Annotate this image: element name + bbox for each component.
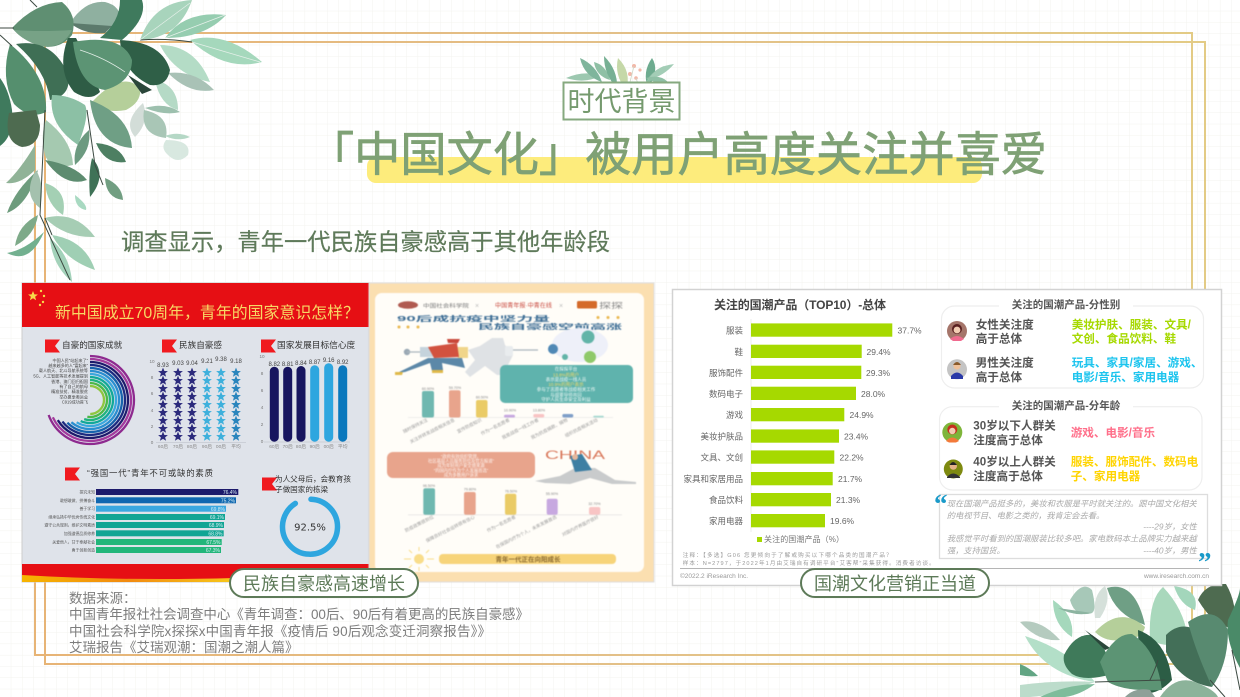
star pictogram chart	[149, 339, 246, 450]
confidence bar chart: 2	[261, 422, 264, 427]
consumer quotes: 我感觉平时看到的国潮服装比较多吧。家电数码本土品牌实力越来越	[947, 534, 1198, 544]
teal callout: 与叔辈导师共同	[550, 392, 582, 398]
data sources: 中国社会科学院x探探x中国青年报《疫情后 90后观念变迁洞察报告》》	[69, 623, 491, 639]
qualities horizontal bar chart: 68.8%	[208, 532, 223, 538]
top 10 bar chart: 家用电器	[709, 516, 743, 526]
qualities horizontal bar chart: 加强道德品质修养	[64, 531, 95, 536]
radial achievements chart: 载人航天、北斗导航系统等	[39, 367, 88, 373]
small bar chart 2: 作为一名志愿者	[486, 513, 517, 534]
donut: 92.5%: 92.5%	[294, 522, 326, 534]
top 10 bar chart: 28.0%	[861, 389, 886, 399]
teal callout: 在探探平台	[555, 366, 578, 372]
top 10 bar chart: 美妆护肤品	[700, 432, 743, 442]
top 10 bar chart	[683, 297, 922, 544]
salmon callout	[387, 452, 535, 478]
star pictogram chart: 8.93	[157, 363, 169, 369]
top 10 bar chart: 22.2%	[840, 452, 864, 462]
footer rule and credits: www.iresearch.com.cn	[1143, 573, 1209, 580]
confidence bar chart: 8	[261, 371, 264, 376]
consumer quotes: ”	[1198, 547, 1212, 577]
star pictogram chart: 4	[151, 408, 154, 413]
confidence bar chart: 60后	[269, 443, 280, 450]
icon: woman avatar	[947, 321, 967, 341]
qualities horizontal bar chart: 67.3%	[206, 548, 221, 554]
age box: 游戏、电影/音乐	[1071, 426, 1155, 440]
top 10 bar chart: 关注的国潮产品（%）	[764, 534, 844, 544]
donut: 92.5%	[262, 474, 351, 555]
salmon callout: “政府有效组织管理、	[441, 453, 481, 460]
qualities horizontal bar chart: 75.2%	[221, 498, 236, 504]
foliage: top-left corner	[0, 0, 262, 282]
top 10 bar chart: 21.3%	[836, 495, 861, 505]
small bar chart 2: 79.80%	[464, 488, 477, 492]
age box: 30岁以下人群关	[973, 418, 1056, 432]
salmon callout: “的国内疗作为个人发展首选”	[434, 467, 489, 474]
star pictogram chart: 70后	[173, 443, 183, 450]
top 10 bar chart: 食品饮料	[709, 495, 743, 505]
small bar chart 1: 13.80%	[533, 408, 546, 412]
top 10 bar chart: 19.6%	[830, 516, 855, 526]
small bar chart 2: 55.90%	[546, 492, 559, 496]
gender box: 男性关注度	[976, 356, 1034, 370]
star pictogram chart: 60后	[158, 443, 168, 450]
chart notes: 注释：【多选】G06 您更倾向于了解或购买以下哪个品类的国潮产品？	[683, 551, 892, 559]
radial achievements chart	[33, 339, 134, 444]
salmon callout: 成为年轻用户安全感来源	[437, 462, 485, 469]
small bar chart 1: 关注并转发战疫相关信息	[409, 416, 456, 445]
panel: national-awareness infographic	[22, 283, 369, 582]
qualities horizontal bar chart: 76.4%	[223, 490, 238, 496]
small bar chart 2: 防疫政策很到位	[404, 513, 435, 534]
star pictogram chart: 80后	[187, 443, 197, 450]
confidence bar chart: 6	[261, 388, 264, 393]
data sources: 数据来源：	[69, 591, 136, 606]
star pictogram chart: 平均	[231, 443, 241, 450]
small bar chart 2: 76.50%	[505, 490, 518, 494]
qualities horizontal bar chart: 69.8%	[211, 507, 226, 513]
small bar chart 2: 96.50%	[423, 484, 436, 488]
confidence bar chart: 10	[259, 354, 265, 359]
gender box: 玩具、家具/家居、游戏、	[1072, 356, 1202, 370]
confidence bar chart: 8.81	[282, 362, 294, 368]
star pictogram chart: 民族自豪感	[179, 339, 222, 350]
age box: 注度高于总体	[973, 469, 1043, 483]
infographic heading: 民族自豪感空前高涨	[478, 322, 622, 331]
section tag: 时代背景: 时代背景	[568, 87, 676, 117]
age box: 40岁以上人群关	[973, 455, 1056, 469]
tag ornament: leaf wreath	[566, 56, 674, 90]
icon: young woman avatar	[942, 422, 962, 442]
gender box	[942, 298, 1204, 388]
radial achievements chart: 香港、澳门回归祖国	[51, 378, 88, 384]
infographic heading	[397, 314, 622, 331]
data sources: 中国青年报社社会调查中心《青年调查：00后、90后有着更高的民族自豪感》	[69, 606, 529, 622]
qualities horizontal bar chart: 遵守公共规则，维护文明素质	[44, 522, 95, 528]
partner logos	[398, 300, 624, 310]
illustration: medic and virus	[395, 328, 608, 377]
small bar chart 1: 10.90%	[504, 408, 517, 412]
top 10 bar chart: 数码电子	[709, 389, 743, 399]
star pictogram chart: 9.18	[230, 359, 242, 365]
top 10 bar chart: 24.9%	[850, 410, 874, 420]
confidence bar chart: 8.87	[309, 360, 321, 366]
small bar chart 1: 组织抗疫相关活动	[564, 416, 599, 439]
consumer quotes: 强，支持国货。	[947, 545, 1005, 555]
confidence bar chart: 9.16	[323, 358, 335, 364]
qualities horizontal bar chart: 69.1%	[210, 515, 225, 521]
consumer quotes: “	[934, 489, 948, 519]
bottom banner	[22, 564, 369, 582]
top 10 bar chart: 29.3%	[866, 368, 891, 378]
small bar chart 1: 我是战疫一线工作者	[501, 416, 540, 441]
gender box: 电影/音乐、家用电器	[1072, 370, 1180, 384]
radial achievements chart: 中国人民“站起来了”	[53, 357, 89, 363]
confidence bar chart: 70后	[283, 443, 293, 450]
red header banner: 新中国成立70周年，青年的国家意识怎样？	[55, 303, 359, 322]
small bar chart 2: 32.70%	[588, 502, 601, 506]
confidence bar chart: 90后	[310, 443, 320, 450]
illustration: CHINA runner: CHINA	[545, 448, 605, 462]
radial achievements chart: 举办夏季奥运会	[59, 394, 88, 400]
consumer quotes: ----40岁，男性	[1143, 545, 1197, 555]
small bar chart 1: 60.90%	[422, 387, 435, 391]
title: 「中国文化」被用户高度关注并喜爱	[308, 128, 1047, 181]
small bar chart 1: 宣传防疫知识	[456, 416, 483, 435]
top 10 bar chart: 家具和家居用品	[683, 474, 743, 484]
sun and closing banner	[404, 547, 616, 571]
star pictogram chart: 9.21	[201, 359, 213, 365]
small bar chart 2: 保障良好社会运转很有信心	[425, 513, 476, 544]
consumer quotes: 的电视节目、电影之类的，我肯定会去看。	[947, 510, 1104, 520]
small bar chart 2	[404, 484, 622, 550]
gender box: 文创、食品饮料、鞋	[1072, 332, 1176, 346]
qualities horizontal bar chart: 善于学习	[79, 506, 95, 511]
consumer quotes: 现在国潮产品挺多的，美妆和衣服是平时就关注的。跟中国文化相关	[947, 499, 1197, 509]
small bar chart 1	[402, 386, 613, 445]
foliage: bottom-right corner	[1020, 584, 1240, 697]
radial achievements chart: 越来越多的人“富起来”	[48, 362, 89, 368]
radial achievements chart: 有了自己的航母	[59, 383, 88, 389]
qualities horizontal bar chart: 继承弘扬中华优秀传统文化	[48, 514, 95, 520]
top 10 bar chart: 游戏	[726, 410, 743, 420]
confidence bar chart: 8.92	[337, 360, 349, 366]
confidence bar chart: 00后	[324, 443, 334, 450]
teal callout: 参与了志愿者等战疫相关工作	[537, 386, 596, 393]
icon: older man avatar	[944, 460, 963, 478]
consumer quotes: ----29岁，女性	[1143, 521, 1197, 531]
top 10 bar chart: 关注的国潮产品（TOP10）-总体	[714, 297, 886, 312]
star pictogram chart: 8	[151, 375, 154, 380]
gender box: 女性关注度	[976, 318, 1034, 332]
radial achievements chart: 自豪的国家成就	[62, 339, 123, 350]
teal callout: 10.9%的用户表示	[548, 381, 584, 388]
yellow title highlight	[367, 157, 982, 183]
infographic heading: 90后成抗疫中坚力量	[397, 314, 550, 323]
age box: 注度高于总体	[973, 433, 1043, 447]
data sources	[69, 591, 529, 655]
star pictogram chart: 10	[149, 359, 155, 364]
gender box: 美妆护肤、服装、文具/	[1072, 318, 1192, 332]
star pictogram chart: 0	[151, 440, 154, 445]
qualities horizontal bar chart	[44, 467, 238, 554]
consumer quotes	[934, 489, 1212, 577]
teal callout: 守护人民生命安全及利益	[541, 396, 591, 403]
donut: 92.5%: 子做国家的栋梁	[275, 484, 329, 494]
small bar chart 1: 随时保持关注	[402, 416, 429, 435]
small bar chart 1: 60.50%	[476, 396, 489, 400]
star pictogram chart: 9.03	[172, 361, 184, 367]
small bar chart 1: 59.70%	[449, 386, 462, 390]
salmon callout: 成为多数用户诉求	[444, 472, 479, 478]
partner logos: ×	[559, 303, 563, 310]
star pictogram chart: 9.38	[215, 357, 227, 363]
star pictogram chart: 90后	[202, 443, 212, 450]
top 10 bar chart: 21.7%	[838, 474, 863, 484]
icon: man avatar	[947, 359, 967, 379]
confidence bar chart: 0	[261, 439, 264, 444]
top 10 bar chart: 23.4%	[844, 432, 869, 442]
confidence bar chart: 国家发展目标信心度	[277, 339, 356, 350]
pill label: 国潮文化营销正当道: 国潮文化营销正当道	[814, 574, 976, 594]
subtitle: 调查显示，青年一代民族自豪感高于其他年龄段	[121, 229, 610, 255]
confidence bar chart: 80后	[296, 443, 306, 450]
teal callout: 13.8%的用户	[553, 372, 579, 378]
data sources: 艾瑞报告《艾瑞观潮：国潮之潮人篇》	[69, 640, 298, 655]
illustration: CHINA runner	[535, 448, 636, 484]
qualities horizontal bar chart: 67.5%	[206, 540, 221, 546]
qualities horizontal bar chart: 敢想敢做、拼搏奋斗	[60, 498, 95, 503]
pill label: 民族自豪感高速增长: 民族自豪感高速增长	[243, 574, 405, 594]
small bar chart 2: 在保国内疗为个人，未来发展首选	[495, 513, 558, 550]
footer rule and credits	[680, 568, 1209, 580]
pill label: 民族自豪感高速增长	[230, 569, 418, 597]
small bar chart 2: 对国内疗养医疗很好	[561, 513, 600, 538]
top 10 bar chart: 服饰配件	[709, 368, 743, 378]
gender box: 高于总体	[976, 332, 1022, 346]
age box: 子、家用电器	[1071, 469, 1141, 483]
partner logos: 中国社会科学院	[423, 302, 469, 310]
star pictogram chart: 00后	[216, 443, 226, 450]
top 10 bar chart: 鞋	[734, 347, 743, 357]
sun and closing banner: 青年一代正在向阳成长	[496, 554, 561, 564]
qualities horizontal bar chart: 关爱他人，甘于奉献社会	[52, 540, 95, 544]
age box: 服装、服饰配件、数码电	[1071, 455, 1199, 469]
panel: post-90s infographic	[369, 283, 654, 582]
radial achievements chart: 精准扶贫、精准脱贫	[51, 388, 88, 394]
confidence bar chart: 8.84	[295, 361, 307, 367]
star pictogram chart: 9.04	[186, 361, 198, 367]
confidence bar chart	[259, 339, 356, 450]
chart notes	[683, 551, 935, 567]
age box: 关注的国潮产品-分年龄	[1012, 399, 1121, 412]
teal callout	[500, 365, 633, 403]
qualities horizontal bar chart: 68.9%	[209, 523, 224, 529]
small bar chart 1: 我为抗疫捐款、捐物	[530, 416, 569, 441]
radial achievements chart: C919成功首飞	[62, 398, 88, 404]
confidence bar chart: 4	[261, 405, 264, 410]
top 10 bar chart: 37.7%	[898, 326, 922, 336]
panel: iResearch report	[672, 290, 1222, 586]
qualities horizontal bar chart: 探究未知	[79, 490, 95, 494]
qualities horizontal bar chart: “强国一代”青年不可或缺的素质	[87, 468, 213, 478]
confidence bar chart: 8.82	[268, 362, 281, 368]
donut: 92.5%: 为人父母后，会教育孩	[275, 474, 351, 484]
top 10 bar chart: 文具、文创	[700, 452, 743, 462]
gender box: 高于总体	[976, 370, 1022, 384]
pill label: 国潮文化营销正当道	[801, 569, 989, 597]
footer rule and credits: ©2022.2 iResearch Inc.	[680, 572, 748, 580]
partner logos: 探探	[599, 300, 624, 310]
age box	[940, 399, 1202, 490]
partner logos: 中国青年报·中青在线	[495, 302, 552, 310]
star pictogram chart: 2	[151, 424, 154, 429]
star pictogram chart: 6	[151, 391, 154, 396]
small bar chart 1: 作为一名志愿者	[480, 416, 511, 437]
salmon callout: 社区基层人员服务到位及官方报道”	[428, 458, 495, 464]
teal callout: 表示是战疫一线人员	[546, 376, 587, 383]
partner logos: ×	[475, 303, 479, 310]
chart notes: 样本：N=2797，于2022年1月由艾瑞自有调研平台“艾客帮”采集获得。消费者访谈。	[683, 559, 935, 567]
red header banner	[22, 283, 369, 327]
top 10 bar chart: 29.4%	[866, 347, 891, 357]
top 10 bar chart: 服装	[726, 326, 743, 336]
qualities horizontal bar chart: 勇于创新创造	[72, 548, 95, 552]
confidence bar chart: 平均	[338, 443, 348, 450]
radial achievements chart: 5G、人工智能等技术发展提到	[33, 372, 88, 378]
gender box: 关注的国潮产品-分性别	[1012, 298, 1120, 311]
